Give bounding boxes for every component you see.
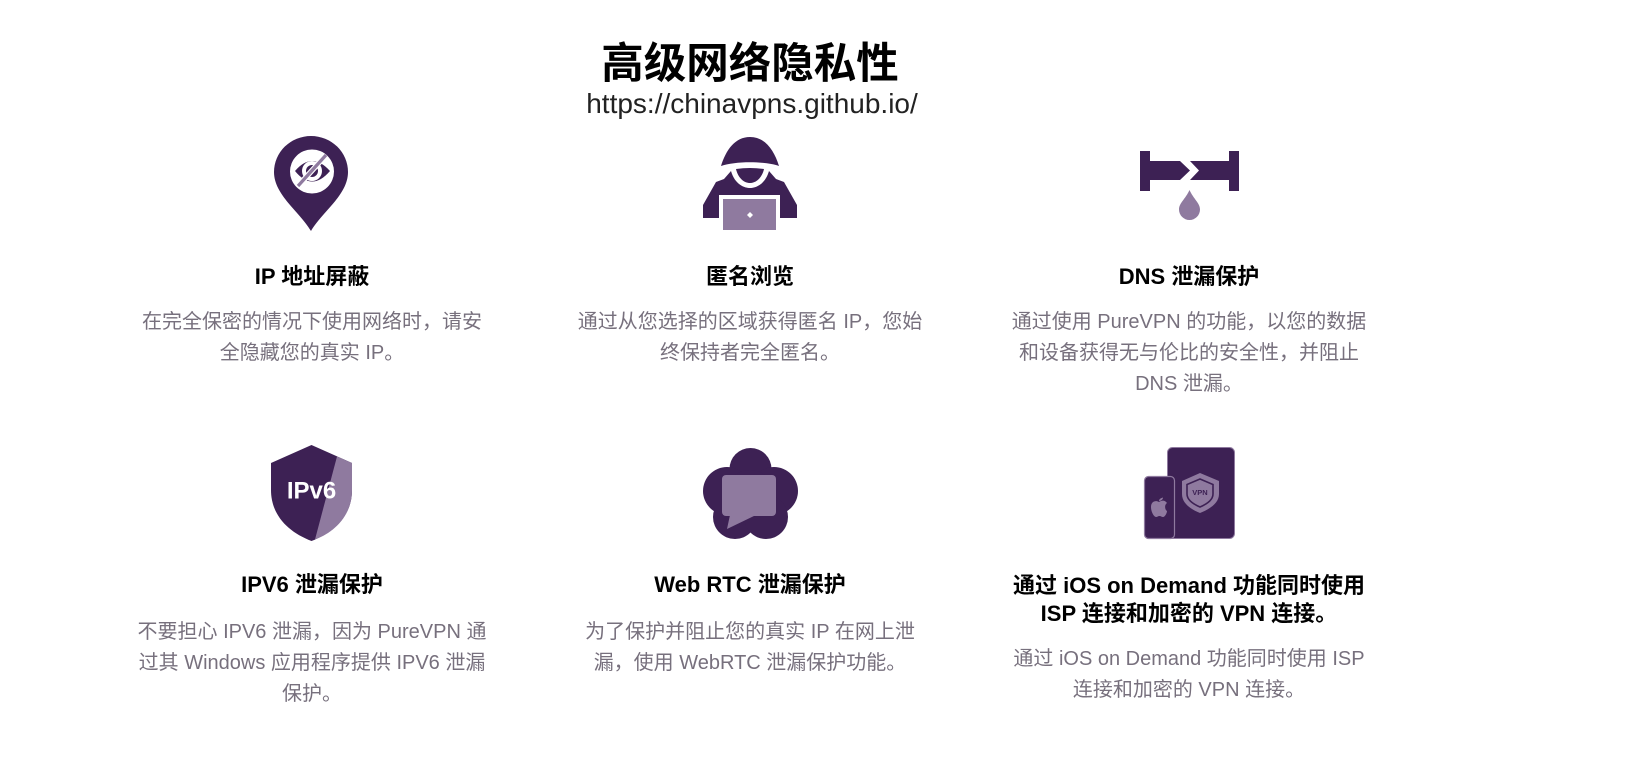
panel: IP address masking — [142, 136, 482, 364]
icon: tablet and phone with VPN shield: VPN — [1192, 488, 1208, 497]
icon: tablet and phone with VPN shield — [1144, 447, 1235, 540]
description — [1012, 310, 1366, 395]
description: 在完全保密的情况下使用网络时，请安 — [142, 311, 482, 333]
description: 通过 iOS on Demand 功能同时使用 ISP — [1013, 648, 1365, 670]
description: 漏，使用 WebRTC 泄漏保护功能。 — [594, 652, 906, 674]
panel: iOS on Demand — [1013, 447, 1365, 700]
heading: ISP 连接和加密的 VPN 连接。 — [1041, 600, 1337, 626]
panel: IPv6 leak protection — [138, 445, 486, 705]
description — [138, 621, 486, 705]
description: 为了保护并阻止您的真实 IP 在网上泄 — [585, 621, 915, 643]
icon: location pin with crossed eye — [274, 136, 348, 231]
heading: DNS 泄漏保护 — [1119, 264, 1259, 289]
description: 全隐藏您的真实 IP。 — [220, 342, 404, 364]
icon: IPv6 shield — [271, 445, 352, 541]
description — [1013, 648, 1365, 700]
heading: Web RTC 泄漏保护 — [654, 572, 846, 597]
description: 终保持者完全匿名。 — [660, 342, 840, 364]
icon: broken pipe with drop — [1140, 151, 1239, 220]
panel: DNS leak protection — [1012, 151, 1366, 395]
icon: flower with speech bubble — [703, 448, 798, 539]
panel: anonymous browsing — [578, 137, 922, 364]
heading: IPV6 泄漏保护 — [241, 572, 383, 597]
heading — [1013, 573, 1365, 626]
description: 过其 Windows 应用程序提供 IPV6 泄漏 — [139, 652, 485, 674]
description: 保护。 — [282, 683, 342, 705]
heading: IP 地址屏蔽 — [255, 264, 369, 289]
description: 连接和加密的 VPN 连接。 — [1073, 678, 1305, 700]
description: 和设备获得无与伦比的安全性，并阻止 — [1019, 342, 1359, 364]
heading: 匿名浏览 — [706, 264, 794, 289]
icon: IPv6 shield: IPv6 — [287, 478, 336, 504]
heading: 通过 iOS on Demand 功能同时使用 — [1013, 573, 1365, 598]
description — [585, 621, 915, 674]
description: 不要担心 IPV6 泄漏，因为 PureVPN 通 — [138, 621, 486, 643]
description — [142, 310, 482, 364]
icon: hooded figure with laptop — [703, 137, 797, 230]
title: 高级网络隐私性 — [601, 41, 899, 88]
panel: WebRTC leak protection — [585, 448, 915, 674]
description: 通过使用 PureVPN 的功能，以您的数据 — [1012, 311, 1366, 333]
source url: https://chinavpns.github.io/ — [586, 88, 918, 119]
description: 通过从您选择的区域获得匿名 IP，您始 — [578, 311, 922, 333]
description — [578, 311, 922, 364]
description: DNS 泄漏。 — [1135, 373, 1243, 395]
